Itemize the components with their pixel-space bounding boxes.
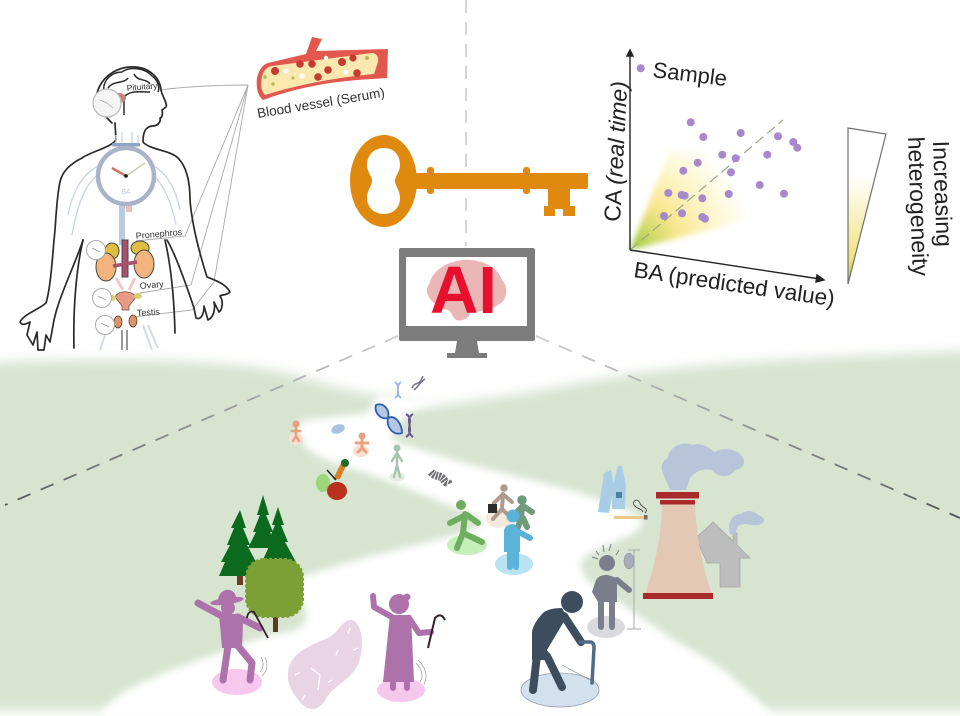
icon: small grey DNA strand — [412, 376, 425, 390]
artery — [126, 198, 132, 212]
neck band — [112, 143, 140, 146]
reproductive organs — [100, 278, 158, 350]
icon: blue DNA helix — [376, 404, 402, 434]
icon: house — [696, 511, 764, 587]
divider: vertical dashed line — [465, 0, 467, 246]
panel: human body with organ clocks — [20, 67, 248, 350]
pituitary gland — [112, 93, 126, 103]
x axis label: BA (predicted value) — [632, 257, 836, 311]
organ label: Pituitary: Pituitary — [126, 80, 159, 93]
small clock: testis — [96, 316, 114, 334]
sample points — [660, 118, 801, 223]
small clock: pronephros — [86, 240, 106, 260]
panel: blood vessel — [256, 37, 388, 121]
y axis — [627, 50, 633, 250]
icon: cigarette — [614, 500, 648, 520]
organ label: Testis: Testis — [137, 307, 161, 318]
icon: alcohol bottles — [598, 466, 626, 513]
figure: fetus and disc — [289, 420, 303, 445]
monitor stand — [447, 341, 487, 358]
brain — [427, 260, 506, 321]
icon: blue fish — [330, 422, 346, 436]
landscape: white winding road — [98, 395, 775, 716]
AI text: AI — [430, 253, 497, 328]
figure: person with briefcase — [486, 484, 512, 528]
figure: teal green person — [515, 495, 532, 527]
icon: small blue DNA strand — [395, 382, 401, 398]
label: Increasing: Increasing — [928, 140, 958, 247]
small clock: pituitary — [93, 89, 121, 117]
heterogeneity triangle legend — [848, 128, 958, 284]
legend label: Sample — [651, 57, 728, 91]
figure: blue person — [495, 510, 533, 575]
legend dot — [637, 64, 645, 72]
body outline — [20, 67, 230, 350]
organ label: Ovary: Ovary — [139, 279, 165, 291]
organ label: Pronephros: Pronephros — [135, 227, 183, 241]
vessel label: Blood vessel (Serum) — [256, 85, 386, 121]
figure: grey person on IV drip — [587, 544, 641, 638]
figure: pale green child — [389, 444, 405, 482]
divider: left dashed line — [5, 336, 398, 505]
blood vessels — [68, 132, 180, 235]
vessel body — [257, 37, 388, 100]
figure: baby and disc — [353, 432, 369, 457]
icon: chromosome — [431, 472, 449, 484]
blood cells — [263, 54, 369, 86]
small clock: ovary — [92, 288, 112, 308]
monitor frame — [399, 248, 535, 341]
heterogeneity wedge — [630, 150, 780, 250]
figure: elderly person with walker — [521, 591, 599, 707]
connector lines from organs to blood vessel — [133, 85, 248, 317]
scatter chart: CA vs BA — [599, 50, 836, 311]
figure: elderly woman with cane — [373, 594, 445, 702]
icon: factory smoke — [662, 443, 744, 490]
label: heterogeneity: heterogeneity — [903, 136, 934, 277]
y axis label: CA (real time) — [599, 80, 632, 222]
figure: elderly man with hat and cane — [198, 590, 268, 695]
monitor screen — [406, 257, 527, 326]
icon: conifer trees — [219, 495, 296, 585]
kidneys and adrenal glands — [96, 240, 154, 281]
icon: cooling tower factory — [643, 492, 713, 599]
icon: leafy bush tree — [246, 559, 303, 632]
gradient triangle — [848, 128, 886, 284]
icon: AI monitor — [399, 248, 535, 358]
diagonal reference line — [630, 120, 783, 250]
icon: purple DNA helix — [406, 414, 413, 437]
large BA clock — [98, 148, 154, 204]
landscape: green hills — [0, 350, 960, 711]
divider: right dashed line — [536, 336, 960, 518]
figure: green runner — [447, 500, 487, 555]
aorta — [119, 203, 125, 245]
icon: fruit and vegetables — [316, 459, 349, 500]
large BA clock: BA — [121, 189, 131, 196]
vessel serum interior — [261, 53, 378, 95]
icon: golden key — [350, 135, 588, 227]
brain outline — [104, 69, 159, 115]
icon: melting clock — [288, 620, 362, 709]
x axis — [630, 250, 824, 282]
